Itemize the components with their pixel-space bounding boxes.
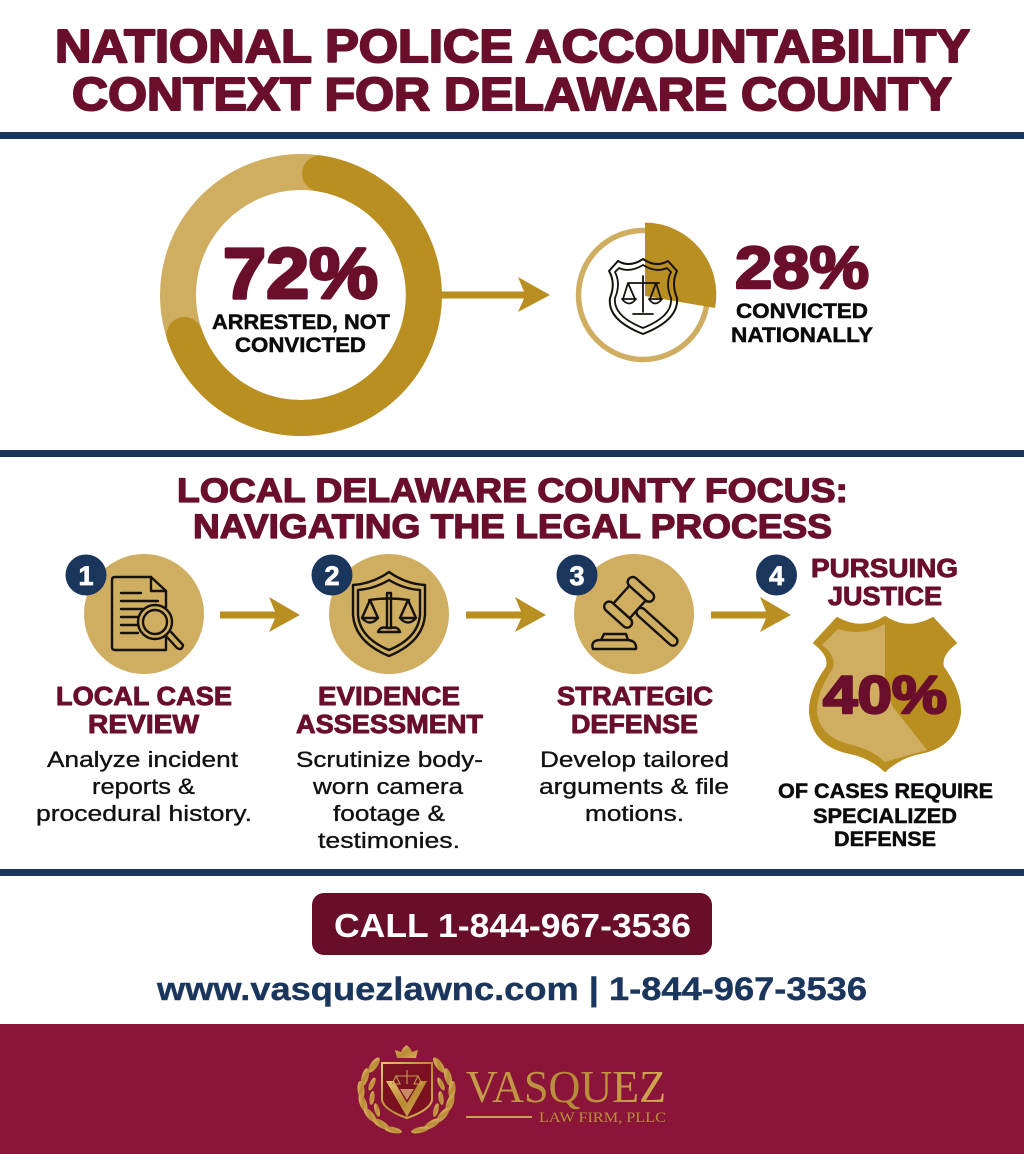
logo wordmark: VASQUEZ: [466, 1062, 666, 1112]
heading: local focus: [177, 472, 848, 546]
arrow: step 2 to 3: [466, 597, 546, 632]
arrow: to 28%: [441, 277, 550, 312]
shield: 40%: 40%: [823, 666, 947, 725]
title: [55, 20, 970, 120]
step 2: evidence assessment: Scrutinize body-: [296, 747, 483, 772]
icon: document with magnifier: [112, 577, 183, 650]
step 2: evidence assessment: footage &: [333, 801, 445, 826]
badge 2: 2: [324, 561, 340, 591]
arrow: step 3 to 4: [711, 597, 791, 632]
badge 4: 4: [769, 561, 784, 591]
heading: local focus: LOCAL DELAWARE COUNTY FOCUS:: [177, 472, 848, 510]
step 4: pursuing justice: OF CASES REQUIRE: [778, 780, 993, 803]
title: CONTEXT FOR DELAWARE COUNTY: [72, 68, 952, 120]
crown: [395, 1045, 418, 1058]
step 1: local case review: [36, 554, 252, 826]
step 3: strategic defense: [539, 554, 729, 826]
step 2: evidence assessment: worn camera: [312, 774, 464, 799]
step 3: strategic defense: STRATEGIC: [557, 683, 713, 711]
stat: 28% convicted nationally: 28%: [735, 235, 869, 301]
panel: national statistics: [178, 172, 873, 418]
title: NATIONAL POLICE ACCOUNTABILITY: [55, 20, 970, 72]
donut chart: 72% arrested, not convicted: [178, 172, 424, 418]
badge 1: [66, 554, 106, 596]
call button: [312, 893, 712, 955]
badge 4: [756, 554, 797, 596]
pie icon: 28% convicted with shield: [578, 222, 716, 360]
step 2: evidence assessment: EVIDENCE: [318, 683, 460, 711]
badge 3: 3: [569, 561, 585, 591]
laurel left: [357, 1056, 402, 1135]
badge 3: [556, 554, 598, 596]
logo crest: [357, 1045, 456, 1135]
step 2: evidence assessment: [296, 554, 483, 853]
icon: gavel: [592, 574, 691, 661]
step 1: local case review: Analyze incident: [47, 747, 239, 772]
step 3: strategic defense: arguments & file: [539, 774, 729, 799]
laurel right: [411, 1056, 456, 1135]
step 4: pursuing justice: DEFENSE: [834, 828, 936, 851]
call button: CALL 1-844-967-3536: [334, 907, 691, 944]
donut chart: 72% arrested, not convicted: ARRESTED, NOT: [212, 311, 390, 334]
donut chart: 72% arrested, not convicted: CONVICTED: [235, 334, 366, 357]
stat: 28% convicted nationally: CONVICTED: [736, 300, 868, 323]
shield: 40%: [810, 617, 960, 771]
arrow: step 1 to 2: [220, 597, 300, 632]
stat: 28% convicted nationally: [731, 235, 873, 347]
step 1: local case review: procedural history.: [36, 801, 252, 826]
icon: shield with scales: [353, 572, 425, 656]
step 3: strategic defense: Develop tailored: [540, 747, 729, 772]
step 3: strategic defense: DEFENSE: [571, 711, 698, 739]
step 4: pursuing justice: PURSUING: [811, 555, 958, 583]
badge 1: 1: [78, 561, 94, 591]
step 3: strategic defense: motions.: [585, 801, 684, 826]
heading: local focus: NAVIGATING THE LEGAL PROCESS: [193, 508, 832, 546]
step 1: local case review: reports &: [92, 774, 195, 799]
badge 2: [312, 554, 352, 596]
step 4: pursuing justice: JUSTICE: [828, 583, 942, 611]
step 2: evidence assessment: testimonies.: [318, 828, 460, 853]
step 1: local case review: REVIEW: [88, 711, 200, 739]
shield and V: [382, 1063, 432, 1118]
step 1: local case review: LOCAL CASE: [56, 683, 232, 711]
donut chart: 72% arrested, not convicted: 72%: [223, 235, 378, 314]
step 4: pursuing justice: [756, 554, 993, 851]
step 2: evidence assessment: ASSESSMENT: [296, 711, 483, 739]
stat: 28% convicted nationally: NATIONALLY: [731, 324, 873, 347]
step 4: pursuing justice: SPECIALIZED: [813, 805, 957, 828]
footer band: [0, 1024, 1024, 1154]
website and phone line: www.vasquezlawnc.com | 1-844-967-3536: [156, 971, 867, 1007]
logo wordmark: LAW FIRM, PLLC: [539, 1110, 666, 1126]
